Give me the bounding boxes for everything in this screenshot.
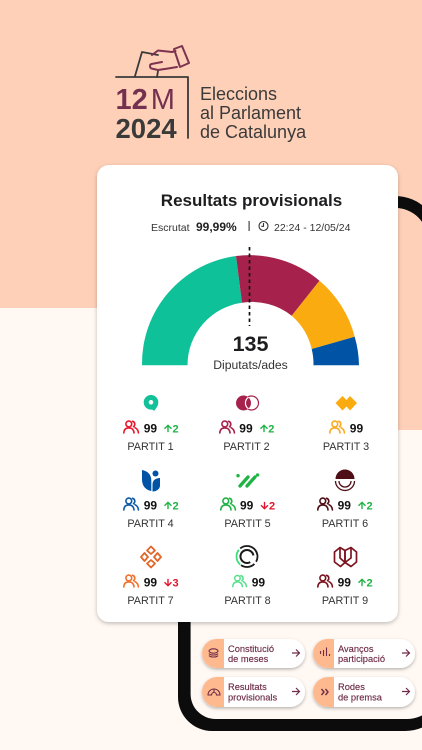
party: PARTIT 7 <box>124 546 179 607</box>
party: PARTIT 8: 99 <box>252 576 265 590</box>
party: PARTIT 3: PARTIT 3 <box>323 441 369 453</box>
icon: party 7 logo <box>141 546 161 568</box>
party: PARTIT 1: PARTIT 1 <box>127 441 174 453</box>
chart: seats semicircle <box>142 247 359 365</box>
event title: de Catalunya <box>200 122 307 142</box>
party: PARTIT 7: 3 <box>172 578 179 590</box>
count status line: 99,99% <box>196 220 237 234</box>
party: PARTIT 9: 99 <box>338 576 351 590</box>
party: PARTIT 3 <box>323 396 369 453</box>
icon: party 8 logo <box>237 546 257 567</box>
button: Avanços participació: Avanços <box>338 644 374 654</box>
button: Rodes de premsa <box>313 677 415 707</box>
party: PARTIT 6 <box>318 470 373 530</box>
button: Avanços participació <box>313 639 415 668</box>
background: peach top <box>0 0 422 308</box>
party: PARTIT 1: 2 <box>172 424 179 436</box>
icon: party 3 logo <box>336 396 357 410</box>
chart total label: Diputats/ades <box>213 358 288 372</box>
phone frame <box>178 196 422 731</box>
party: PARTIT 6: 99 <box>338 498 351 512</box>
count status line: 22:24 - 12/05/24 <box>274 222 351 234</box>
panel: results card <box>97 165 398 622</box>
button: Constitució de meses <box>202 639 305 668</box>
button: Rodes de premsa: de premsa <box>338 692 383 702</box>
party: PARTIT 5: 2 <box>269 500 275 512</box>
party: PARTIT 6: 2 <box>366 500 373 512</box>
12M: 12M <box>116 84 175 116</box>
event title: al Parlament <box>200 103 301 123</box>
party: PARTIT 4: PARTIT 4 <box>127 518 174 530</box>
party: PARTIT 6: PARTIT 6 <box>322 518 368 530</box>
party: PARTIT 9 <box>318 548 373 607</box>
icon: hemicycle <box>208 689 220 695</box>
party: PARTIT 7: PARTIT 7 <box>127 595 174 607</box>
button: Constitució de meses: de meses <box>228 654 269 664</box>
chart total: 135 <box>233 332 268 356</box>
icon: layers <box>209 649 218 657</box>
icon: bars <box>320 648 330 656</box>
event title: Eleccions <box>200 84 277 104</box>
icon: party 2 logo <box>236 396 258 410</box>
icon: party 1 logo <box>144 395 158 411</box>
count status line <box>151 220 351 234</box>
party: PARTIT 9: 2 <box>366 578 373 590</box>
party: PARTIT 4: 2 <box>172 500 179 512</box>
icon: party 4 logo <box>142 470 160 492</box>
party: PARTIT 5: PARTIT 5 <box>224 518 271 530</box>
party: PARTIT 8 <box>224 546 271 607</box>
button: Rodes de premsa: Rodes <box>338 682 365 692</box>
logo: 12M 2024 ballot box <box>116 46 307 144</box>
party: PARTIT 2: PARTIT 2 <box>223 441 270 453</box>
2024: 2024 <box>116 113 177 144</box>
button: Resultats provisionals: Resultats <box>228 682 267 692</box>
party: PARTIT 3: 99 <box>350 422 363 436</box>
party: PARTIT 2: 99 <box>239 422 253 436</box>
button: Constitució de meses: Constitució <box>228 644 274 654</box>
party: PARTIT 5: 99 <box>240 498 254 512</box>
party: PARTIT 5 <box>221 475 275 530</box>
party: PARTIT 2 <box>220 396 274 453</box>
party: PARTIT 1: 99 <box>144 422 157 436</box>
button: Resultats provisionals: provisionals <box>228 692 277 702</box>
count status line: Escrutat <box>151 222 190 234</box>
icon: double chevron <box>322 689 328 695</box>
icon: ballot box and hand <box>116 46 189 138</box>
button: Avanços participació: participació <box>338 654 385 664</box>
icon: party 9 logo <box>334 548 356 566</box>
party: PARTIT 1 <box>124 395 179 453</box>
party: PARTIT 2: 2 <box>268 424 274 436</box>
party: PARTIT 7: 99 <box>144 576 157 590</box>
party: PARTIT 4 <box>124 470 179 530</box>
party: PARTIT 9: PARTIT 9 <box>322 595 368 607</box>
icon: party 5 logo <box>238 475 258 486</box>
icon: party 6 logo <box>336 470 354 490</box>
heading: Resultats provisionals <box>161 191 342 210</box>
button: Resultats provisionals <box>202 677 305 707</box>
party: PARTIT 8: PARTIT 8 <box>224 595 271 607</box>
party: PARTIT 4: 99 <box>144 498 157 512</box>
